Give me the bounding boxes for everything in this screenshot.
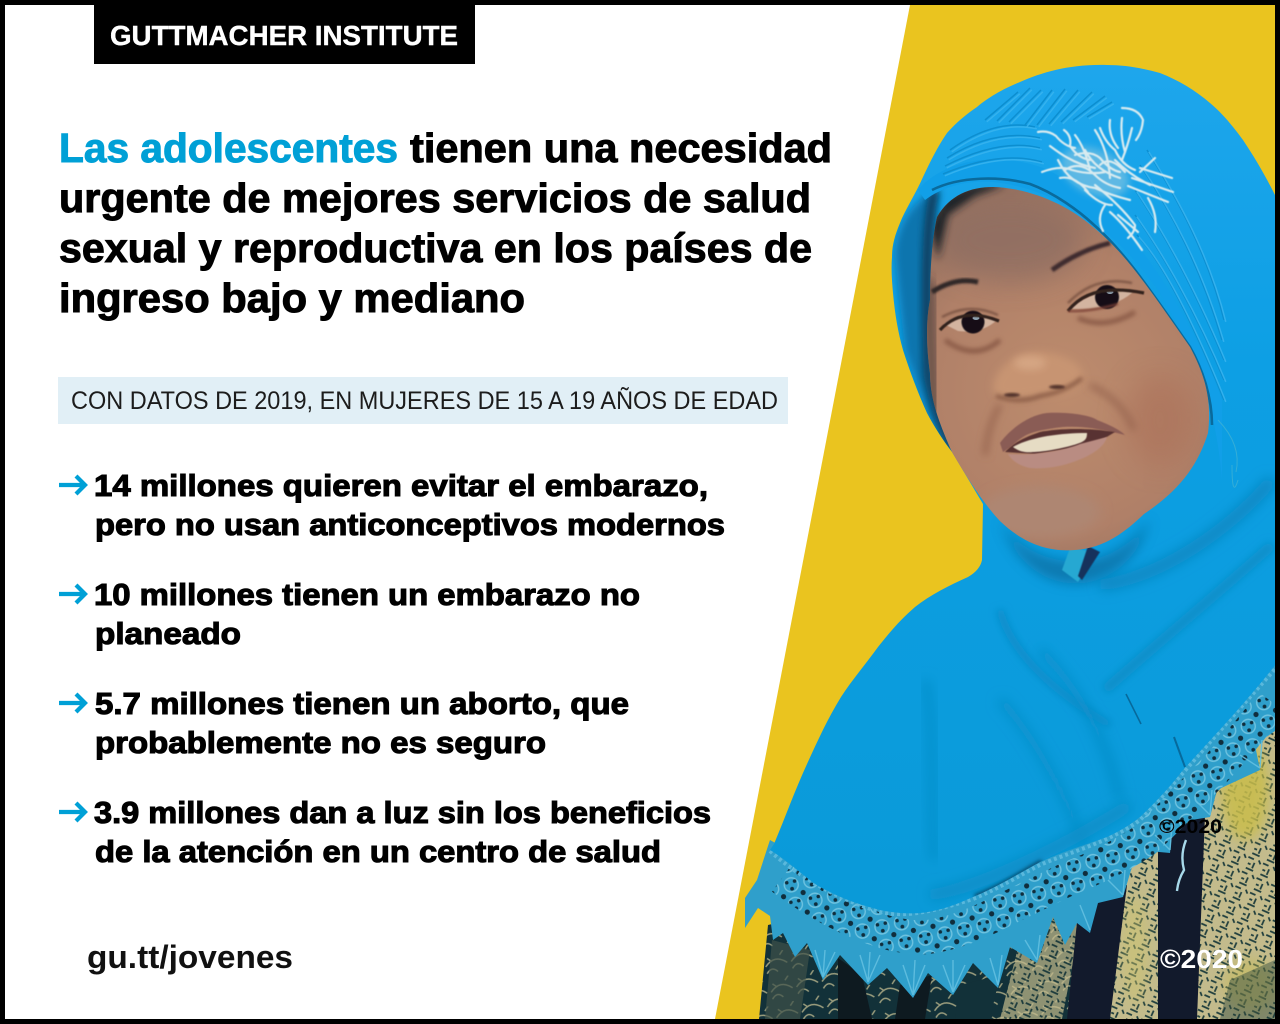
top badge: Guttmacher Institute: GUTTMACHER INSTITUTE — [110, 20, 458, 51]
bullet list — [59, 468, 725, 869]
bullet 4: de la atención en un centro de salud — [95, 834, 661, 869]
loose threads — [1218, 420, 1238, 487]
hijab shading and folds — [895, 88, 1272, 897]
photo: young woman in a blue hijab — [745, 65, 1276, 1019]
under-eye shading — [945, 312, 1135, 351]
quilted pleats — [943, 88, 1226, 402]
bullet 4: 3.9 millones dan a luz sin los beneficios — [94, 795, 711, 830]
mouth and smile — [1000, 413, 1125, 468]
patterned blouse — [759, 660, 1276, 1019]
bullet 3 — [59, 686, 629, 760]
title — [59, 125, 832, 321]
brooch on hijab — [1038, 108, 1173, 250]
subtitle band — [58, 377, 788, 424]
photo watermark: ©2020 — [1159, 817, 1222, 838]
bullet 4 — [59, 795, 711, 869]
bullet 1 — [59, 468, 725, 542]
top badge: Guttmacher Institute — [94, 5, 475, 64]
bullet 1: 14 millones quieren evitar el embarazo, — [94, 468, 708, 503]
lace trim — [745, 655, 1276, 998]
copyright: ©2020 — [1160, 944, 1243, 974]
left brow — [932, 281, 978, 292]
bullet 2 — [59, 577, 640, 651]
title: ingreso bajo y mediano — [59, 275, 525, 321]
title: sexual y reproductiva en los países de — [59, 225, 812, 271]
bullet 3: 5.7 millones tienen un aborto, que — [95, 686, 629, 721]
right brow — [1052, 243, 1110, 270]
hijab body — [770, 65, 1276, 913]
nose — [993, 352, 1083, 400]
bullet 3: probablemente no es seguro — [95, 725, 546, 760]
bullet 2: 10 millones tienen un embarazo no — [94, 577, 640, 612]
title: Las adolescentes — [59, 125, 398, 171]
left eye — [940, 309, 999, 334]
right eye — [1068, 281, 1144, 311]
bullet 2: planeado — [95, 616, 241, 651]
yellow slanted panel — [715, 5, 1275, 1019]
subtitle band: CON DATOS DE 2019, EN MUJERES DE 15 A 19 AÑOS DE EDAD — [71, 386, 778, 415]
title: tienen una necesidad — [410, 125, 832, 171]
bullet 1: pero no usan anticonceptivos modernos — [95, 507, 725, 542]
title: urgente de mejores servicios de salud — [59, 175, 811, 221]
neck gap — [1062, 550, 1086, 582]
brim band — [921, 162, 1022, 200]
face — [920, 180, 1220, 560]
short link: gu.tt/jovenes — [87, 939, 293, 975]
smile folds — [985, 385, 1134, 455]
